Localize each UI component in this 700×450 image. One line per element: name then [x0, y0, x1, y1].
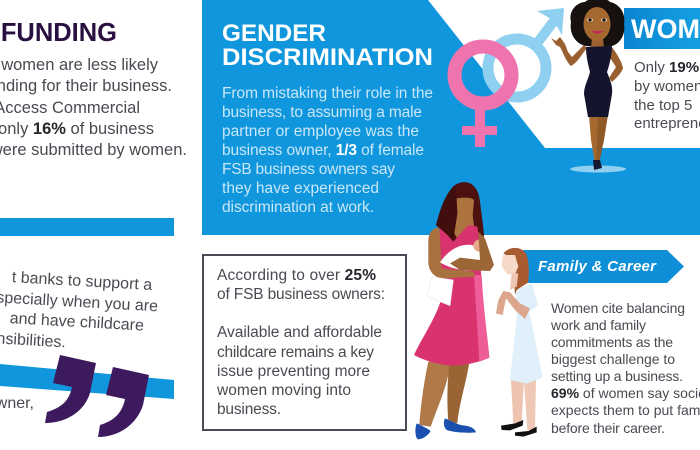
- text block: gender discrimination: discrimination at work.: [222, 199, 374, 216]
- text block: gender discrimination: From mistaking their role in the: [222, 85, 433, 102]
- box: childcare callout: issue preventing more: [217, 363, 370, 380]
- blue bar: funding panel base: [0, 218, 174, 236]
- text block: family and career: work and family: [550, 317, 646, 333]
- text block: family and career: setting up a business.: [551, 368, 683, 384]
- text block: family and career: Women cite balancing: [551, 300, 685, 316]
- text block: funding: [0, 56, 187, 159]
- text block: gender discrimination: business, to assuming a male: [222, 104, 422, 121]
- heading: funding: FUNDING: [1, 19, 117, 47]
- blue tilted band: [0, 364, 174, 399]
- box: childcare callout: According to over 25%: [217, 267, 376, 284]
- panel: gender discrimination: [202, 0, 700, 235]
- illustration: businesswoman: [551, 0, 626, 172]
- text block: tilted quote: and have childcare: [9, 310, 144, 335]
- text block: women: [634, 59, 700, 132]
- illustration: mother holding baby: [414, 182, 494, 439]
- text block: funding: only 16% of business: [0, 120, 154, 138]
- text block: women: the top 5: [634, 97, 692, 114]
- text block: family and career: [550, 300, 700, 436]
- icon: male symbol: [488, 8, 564, 97]
- box: childcare callout: childcare remains a key: [217, 344, 374, 361]
- text block: family and career: commitments as the: [551, 334, 673, 350]
- text block: gender discrimination: partner or employee was the: [222, 123, 419, 140]
- banner: family and career: Family & Career: [538, 258, 657, 275]
- banner: women heading: [624, 8, 700, 49]
- illustration: girl: [496, 248, 543, 437]
- box: childcare callout: Available and affordable: [217, 324, 382, 341]
- text block: tilted quote: [0, 266, 160, 356]
- heading: gender discrimination: GENDER: [222, 20, 326, 47]
- text block: family and career: before their career.: [551, 420, 665, 436]
- text block: tilted quote: t banks to support a: [11, 269, 153, 294]
- icon: female symbol: [454, 46, 512, 147]
- text block: gender discrimination: they have experienced: [222, 180, 379, 197]
- box: childcare callout: [203, 255, 406, 430]
- text block: funding: women are less likely: [0, 56, 159, 74]
- text block: gender discrimination: [222, 85, 433, 216]
- heading: gender discrimination: [222, 20, 433, 71]
- text block: gender discrimination: FSB business owners say: [222, 161, 395, 178]
- heading: gender discrimination: DISCRIMINATION: [222, 44, 433, 71]
- banner: family and career: [523, 250, 684, 283]
- box: childcare callout: business.: [217, 401, 281, 418]
- text block: gender discrimination: business owner, 1/3 of female: [222, 142, 424, 159]
- box: childcare callout: of FSB business owners:: [217, 286, 385, 303]
- text block: family and career: biggest challenge to: [551, 351, 675, 367]
- box: childcare callout: women moving into: [216, 382, 351, 399]
- icon: closing quotation marks: [45, 355, 149, 437]
